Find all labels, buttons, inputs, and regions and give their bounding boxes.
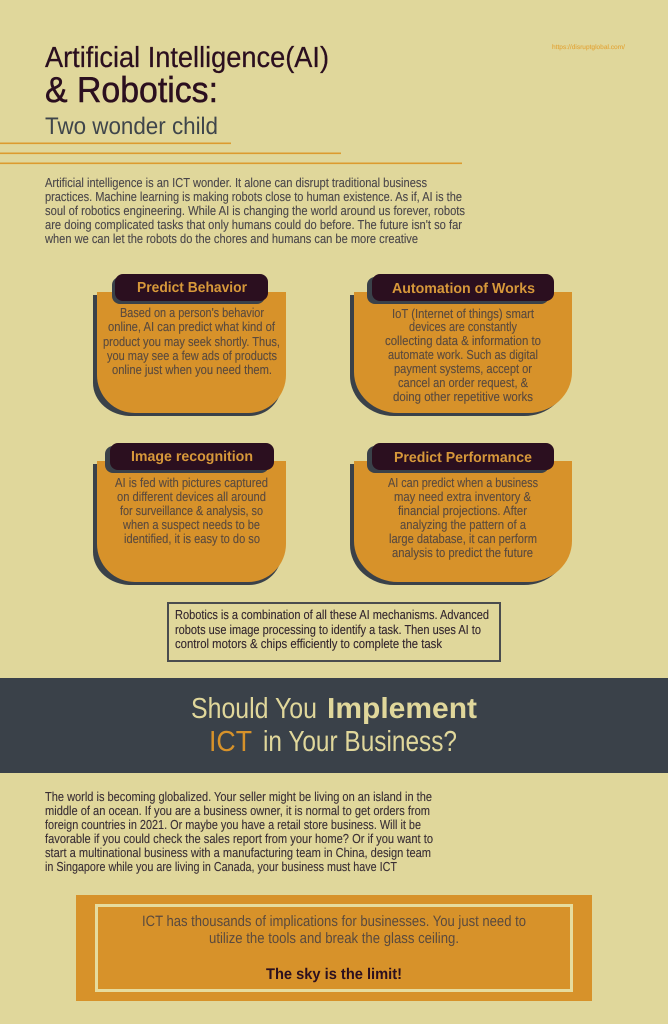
banner heading: ICT [209,726,252,758]
text: image recognition: identified, it is easy to do so [124,531,260,546]
text: predict performance [388,475,538,560]
text: predict performance: financial projections. After [398,503,528,518]
callout tagline: The sky is the limit! [266,966,402,983]
callout: robotics: robots use image processing to identify a task. Then uses AI to [175,622,481,637]
text: predict behavior: product you may seek shortly. Thus, [103,334,280,349]
body paragraph: favorable if you could check the sales report from your home? Or if you want to [45,831,433,846]
banner heading: Implement [327,693,477,725]
text: predict behavior: Based on a person's behavior [120,305,265,320]
heading: image recognition [105,443,274,473]
text: image recognition: when a suspect needs to be [122,517,260,532]
panel: image recognition [93,443,286,585]
callout: robotics [168,603,500,661]
text: image recognition: for surveillance & analysis, so [120,503,263,518]
panel: automation of works [350,274,572,416]
heading: predict behavior [112,274,268,304]
title [45,42,329,110]
callout text [142,913,526,947]
text: automation of works: payment systems, accept or [394,361,533,376]
text: automation of works: collecting data & information to [385,333,541,348]
body paragraph: The world is becoming globalized. Your seller might be living on an island in the [45,789,432,804]
body paragraph: middle of an ocean. If you are a business owner, it is normal to get orders from [45,803,430,818]
text: predict behavior: online just when you need them. [112,362,272,377]
heading: predict performance: Predict Performance [394,450,532,466]
callout: robotics: Robotics is a combination of all these AI mechanisms. Advanced [175,607,489,622]
intro paragraph: Artificial intelligence is an ICT wonder. It alone can disrupt traditional business [45,175,427,190]
body paragraph: in Singapore while you are living in Canada, your business must have ICT [45,859,397,874]
text: automation of works [385,306,541,404]
intro paragraph: soul of robotics engineering. While AI is changing the world around us forever, robots [45,203,465,218]
text: predict performance: AI can predict when a business [388,475,538,490]
heading: automation of works: Automation of Works [392,281,535,297]
text: predict performance: large database, it can perform [389,531,537,546]
callout text: utilize the tools and break the glass ceiling. [209,930,459,947]
closing callout [76,895,592,1001]
banner: should you implement ICT [0,678,668,773]
text: automation of works: automate work. Such as digital [388,347,538,362]
text: predict performance: may need extra inventory & [394,489,531,504]
text: predict behavior [103,305,280,377]
text: automation of works: IoT (Internet of things) smart [392,306,534,321]
intro paragraph: practices. Machine learning is making robots close to human existence. As if, AI is the [45,189,462,204]
text: automation of works: devices are constantly [409,319,517,334]
text: automation of works: doing other repetitive works [393,389,533,404]
banner heading: in Your Business? [263,726,457,758]
intro paragraph [44,175,465,246]
title: & Robotics: [45,69,218,110]
source url: https://disruptglobal.com/ [552,44,625,51]
body paragraph: foreign countries in 2021. Or maybe you have a retail store business. Will it be [45,817,421,832]
callout text: ICT has thousands of implications for businesses. You just need to [142,913,526,930]
heading: automation of works [367,274,554,304]
text: predict behavior: you may see a few ads of products [107,348,277,363]
text: image recognition [115,475,268,546]
title: Artificial Intelligence(AI) [45,42,329,74]
callout: robotics: control motors & chips efficiently to complete the task [175,636,442,651]
banner heading: Should You [191,693,317,725]
body paragraph [45,789,433,874]
subtitle: Two wonder child [45,113,218,140]
heading: predict performance [367,443,554,473]
heading: predict behavior: Predict Behavior [137,280,247,296]
heading: image recognition: Image recognition [131,449,253,465]
banner heading [191,693,477,758]
intro paragraph: are doing complicated tasks that only humans could do before. The future isn't so far [45,217,463,232]
text: automation of works: cancel an order request, & [398,375,528,390]
text: image recognition: on different devices all around [117,489,266,504]
panel: predict behavior [93,274,286,416]
panel: predict performance [350,443,572,585]
text: predict performance: analyzing the pattern of a [400,517,527,532]
intro paragraph: when we can let the robots do the chores and humans can be more creative [44,231,418,246]
body paragraph: start a multinational business with a manufacturing team in China, design team [45,845,431,860]
text: image recognition: AI is fed with pictures captured [115,475,268,490]
text: predict behavior: online, AI can predict what kind of [108,319,275,334]
text: predict performance: analysis to predict the future [392,545,533,560]
